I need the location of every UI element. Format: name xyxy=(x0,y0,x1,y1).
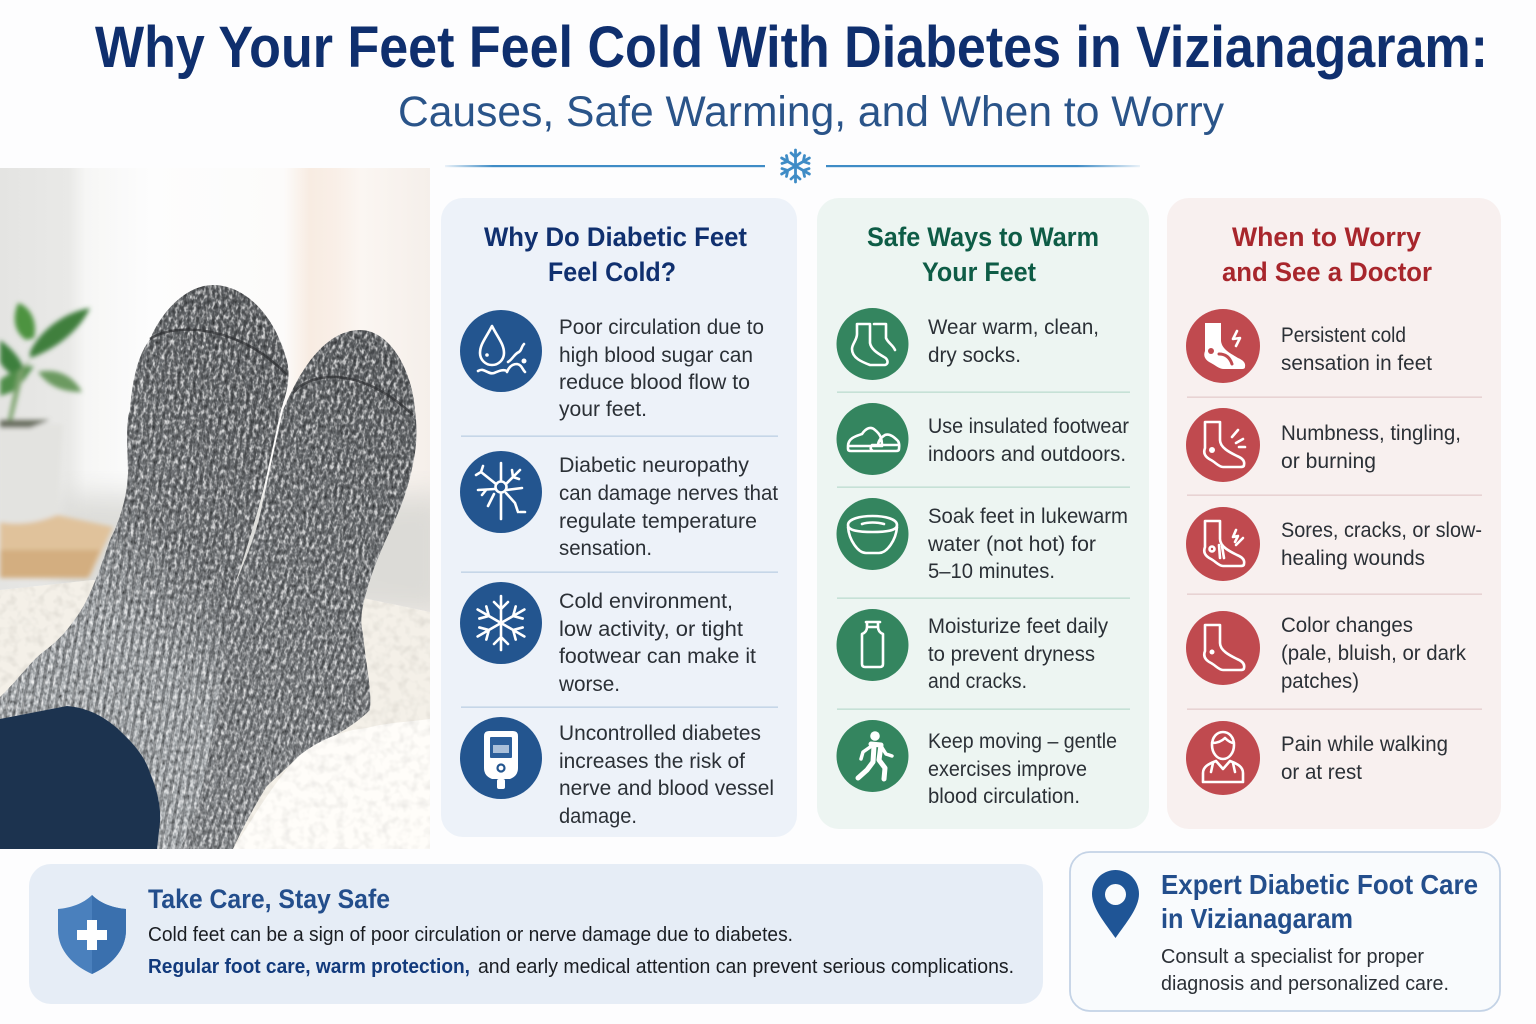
subtitle: Causes, Safe Warming, and When to Worry xyxy=(398,88,1224,136)
icon: foot colour change xyxy=(1186,611,1260,685)
text: soak xyxy=(927,505,1128,583)
text: cold environment: Cold environment, xyxy=(559,590,733,613)
heading: safe ways: Safe Ways to Warm xyxy=(867,222,1099,252)
text: persistent cold: Persistent cold xyxy=(1281,324,1406,347)
text: neuropathy: sensation. xyxy=(559,537,652,560)
text: persistent cold xyxy=(1281,324,1432,375)
text: moisturize: to prevent dryness xyxy=(928,643,1095,666)
left sock xyxy=(0,280,300,850)
callout: expert diabetic foot care xyxy=(1070,852,1500,1011)
panel: why do diabetic feet feel cold xyxy=(441,198,797,837)
heading: take care: Take Care, Stay Safe xyxy=(148,884,390,914)
icon: walking person xyxy=(836,720,908,792)
text: poor circulation: Poor circulation due to xyxy=(559,316,764,339)
text: footwear: Use insulated footwear xyxy=(928,415,1129,438)
heading: when to worry: and See a Doctor xyxy=(1222,257,1432,287)
icon: lotion bottle xyxy=(836,609,908,681)
text: moisturize: and cracks. xyxy=(928,670,1027,693)
text: numbness xyxy=(1281,422,1461,473)
text: sores xyxy=(1281,519,1482,570)
text: poor circulation: high blood sugar can xyxy=(559,344,753,367)
text: sores: Sores, cracks, or slow- xyxy=(1281,519,1482,542)
text: footwear xyxy=(928,415,1129,466)
icon: foot with numbness xyxy=(1186,408,1260,482)
text: cold feet sign: Cold feet can be a sign of poor circulation or nerve damage due to diabetes. xyxy=(148,924,793,946)
text: socks: dry socks. xyxy=(928,344,1021,367)
text: cold environment: worse. xyxy=(558,673,620,696)
text: neuropathy xyxy=(559,454,778,560)
text: uncontrolled diabetes: nerve and blood vessel xyxy=(559,777,774,800)
icon: snowflake xyxy=(460,582,542,664)
photo: feet in grey wool socks on a blanket xyxy=(0,168,450,850)
divider with snowflake xyxy=(445,150,1140,182)
heading: expert care: in Vizianagaram xyxy=(1161,903,1353,934)
text: socks xyxy=(928,316,1099,367)
text: poor circulation: reduce blood flow to xyxy=(559,371,750,394)
text: consult a specialist xyxy=(1161,945,1449,995)
text: uncontrolled diabetes xyxy=(559,722,774,828)
text: soak: 5–10 minutes. xyxy=(928,560,1055,583)
text: keep moving: exercises improve xyxy=(928,758,1087,781)
text: regular foot care: Regular foot care, warm protection, xyxy=(148,956,470,978)
heading: expert care: Expert Diabetic Foot Care xyxy=(1161,869,1478,900)
text: sores: healing wounds xyxy=(1281,547,1425,570)
text: regular foot care: and early medical attention can prevent serious complications. xyxy=(478,956,1014,978)
icon: foot with sores xyxy=(1186,507,1260,581)
text: numbness: Numbness, tingling, xyxy=(1281,422,1461,445)
blanket xyxy=(0,580,430,849)
heading: why: Feel Cold? xyxy=(548,257,676,287)
text: uncontrolled diabetes: Uncontrolled diabetes xyxy=(559,722,761,745)
icon: doctor xyxy=(1186,721,1260,795)
text: uncontrolled diabetes: increases the risk of xyxy=(559,750,745,773)
text: soak: water (not hot) for xyxy=(927,533,1096,556)
plant and pot xyxy=(0,303,113,578)
text: pain while walking: or at rest xyxy=(1281,761,1362,784)
text: neuropathy: regulate temperature xyxy=(559,510,757,533)
text: moisturize: Moisturize feet daily xyxy=(928,615,1108,638)
text: persistent cold: sensation in feet xyxy=(1281,352,1432,375)
text: poor circulation: your feet. xyxy=(559,398,647,421)
icon: foot with pain bolt xyxy=(1186,309,1260,383)
text: keep moving: Keep moving – gentle xyxy=(928,730,1117,753)
text: consult a specialist: Consult a specialist for proper xyxy=(1161,945,1424,968)
text: cold environment: low activity, or tight xyxy=(559,618,743,641)
heading: expert care xyxy=(1161,869,1478,934)
foreground blanket xyxy=(233,719,430,849)
text: uncontrolled diabetes: damage. xyxy=(559,805,637,828)
heading: when to worry xyxy=(1222,222,1432,287)
text: pain while walking: Pain while walking xyxy=(1281,733,1448,756)
text: keep moving xyxy=(928,730,1117,808)
text: footwear: indoors and outdoors. xyxy=(928,443,1126,466)
panel: when to worry and see a doctor xyxy=(1167,198,1501,829)
icon: slippers xyxy=(836,403,908,475)
callout: take care, stay safe xyxy=(29,864,1043,1004)
text: numbness: or burning xyxy=(1281,450,1376,473)
text: consult a specialist: diagnosis and personalized care. xyxy=(1161,972,1449,995)
icon: shield xyxy=(58,895,126,974)
text: color changes: patches) xyxy=(1281,670,1359,693)
icon: location pin xyxy=(1092,870,1139,938)
text: cold environment xyxy=(558,590,756,696)
icon: nerve cell xyxy=(460,451,542,533)
heading: when to worry: When to Worry xyxy=(1232,222,1421,252)
icon: socks xyxy=(836,308,908,380)
text: regular foot care xyxy=(148,956,1014,978)
panel: safe ways to warm your feet xyxy=(817,198,1149,829)
text: moisturize xyxy=(928,615,1108,693)
text: keep moving: blood circulation. xyxy=(928,785,1080,808)
text: color changes: (pale, bluish, or dark xyxy=(1281,642,1466,665)
text: socks: Wear warm, clean, xyxy=(928,316,1099,339)
text: neuropathy: can damage nerves that xyxy=(559,482,778,505)
icon: blood drop and vessels xyxy=(460,310,542,392)
heading: why xyxy=(484,222,747,287)
trousers xyxy=(0,706,160,849)
icon: bowl of water xyxy=(836,498,908,570)
text: color changes xyxy=(1281,614,1466,693)
text: neuropathy: Diabetic neuropathy xyxy=(559,454,749,477)
text: soak: Soak feet in lukewarm xyxy=(928,505,1128,528)
heading: safe ways xyxy=(867,222,1099,287)
icon: glucose meter xyxy=(460,717,542,799)
text: cold environment: footwear can make it xyxy=(559,645,756,668)
text: color changes: Color changes xyxy=(1281,614,1413,637)
right sock xyxy=(180,330,416,849)
text: pain while walking xyxy=(1281,733,1448,784)
heading: safe ways: Your Feet xyxy=(922,257,1036,287)
heading: why: Why Do Diabetic Feet xyxy=(484,222,747,252)
text: poor circulation xyxy=(559,316,764,421)
